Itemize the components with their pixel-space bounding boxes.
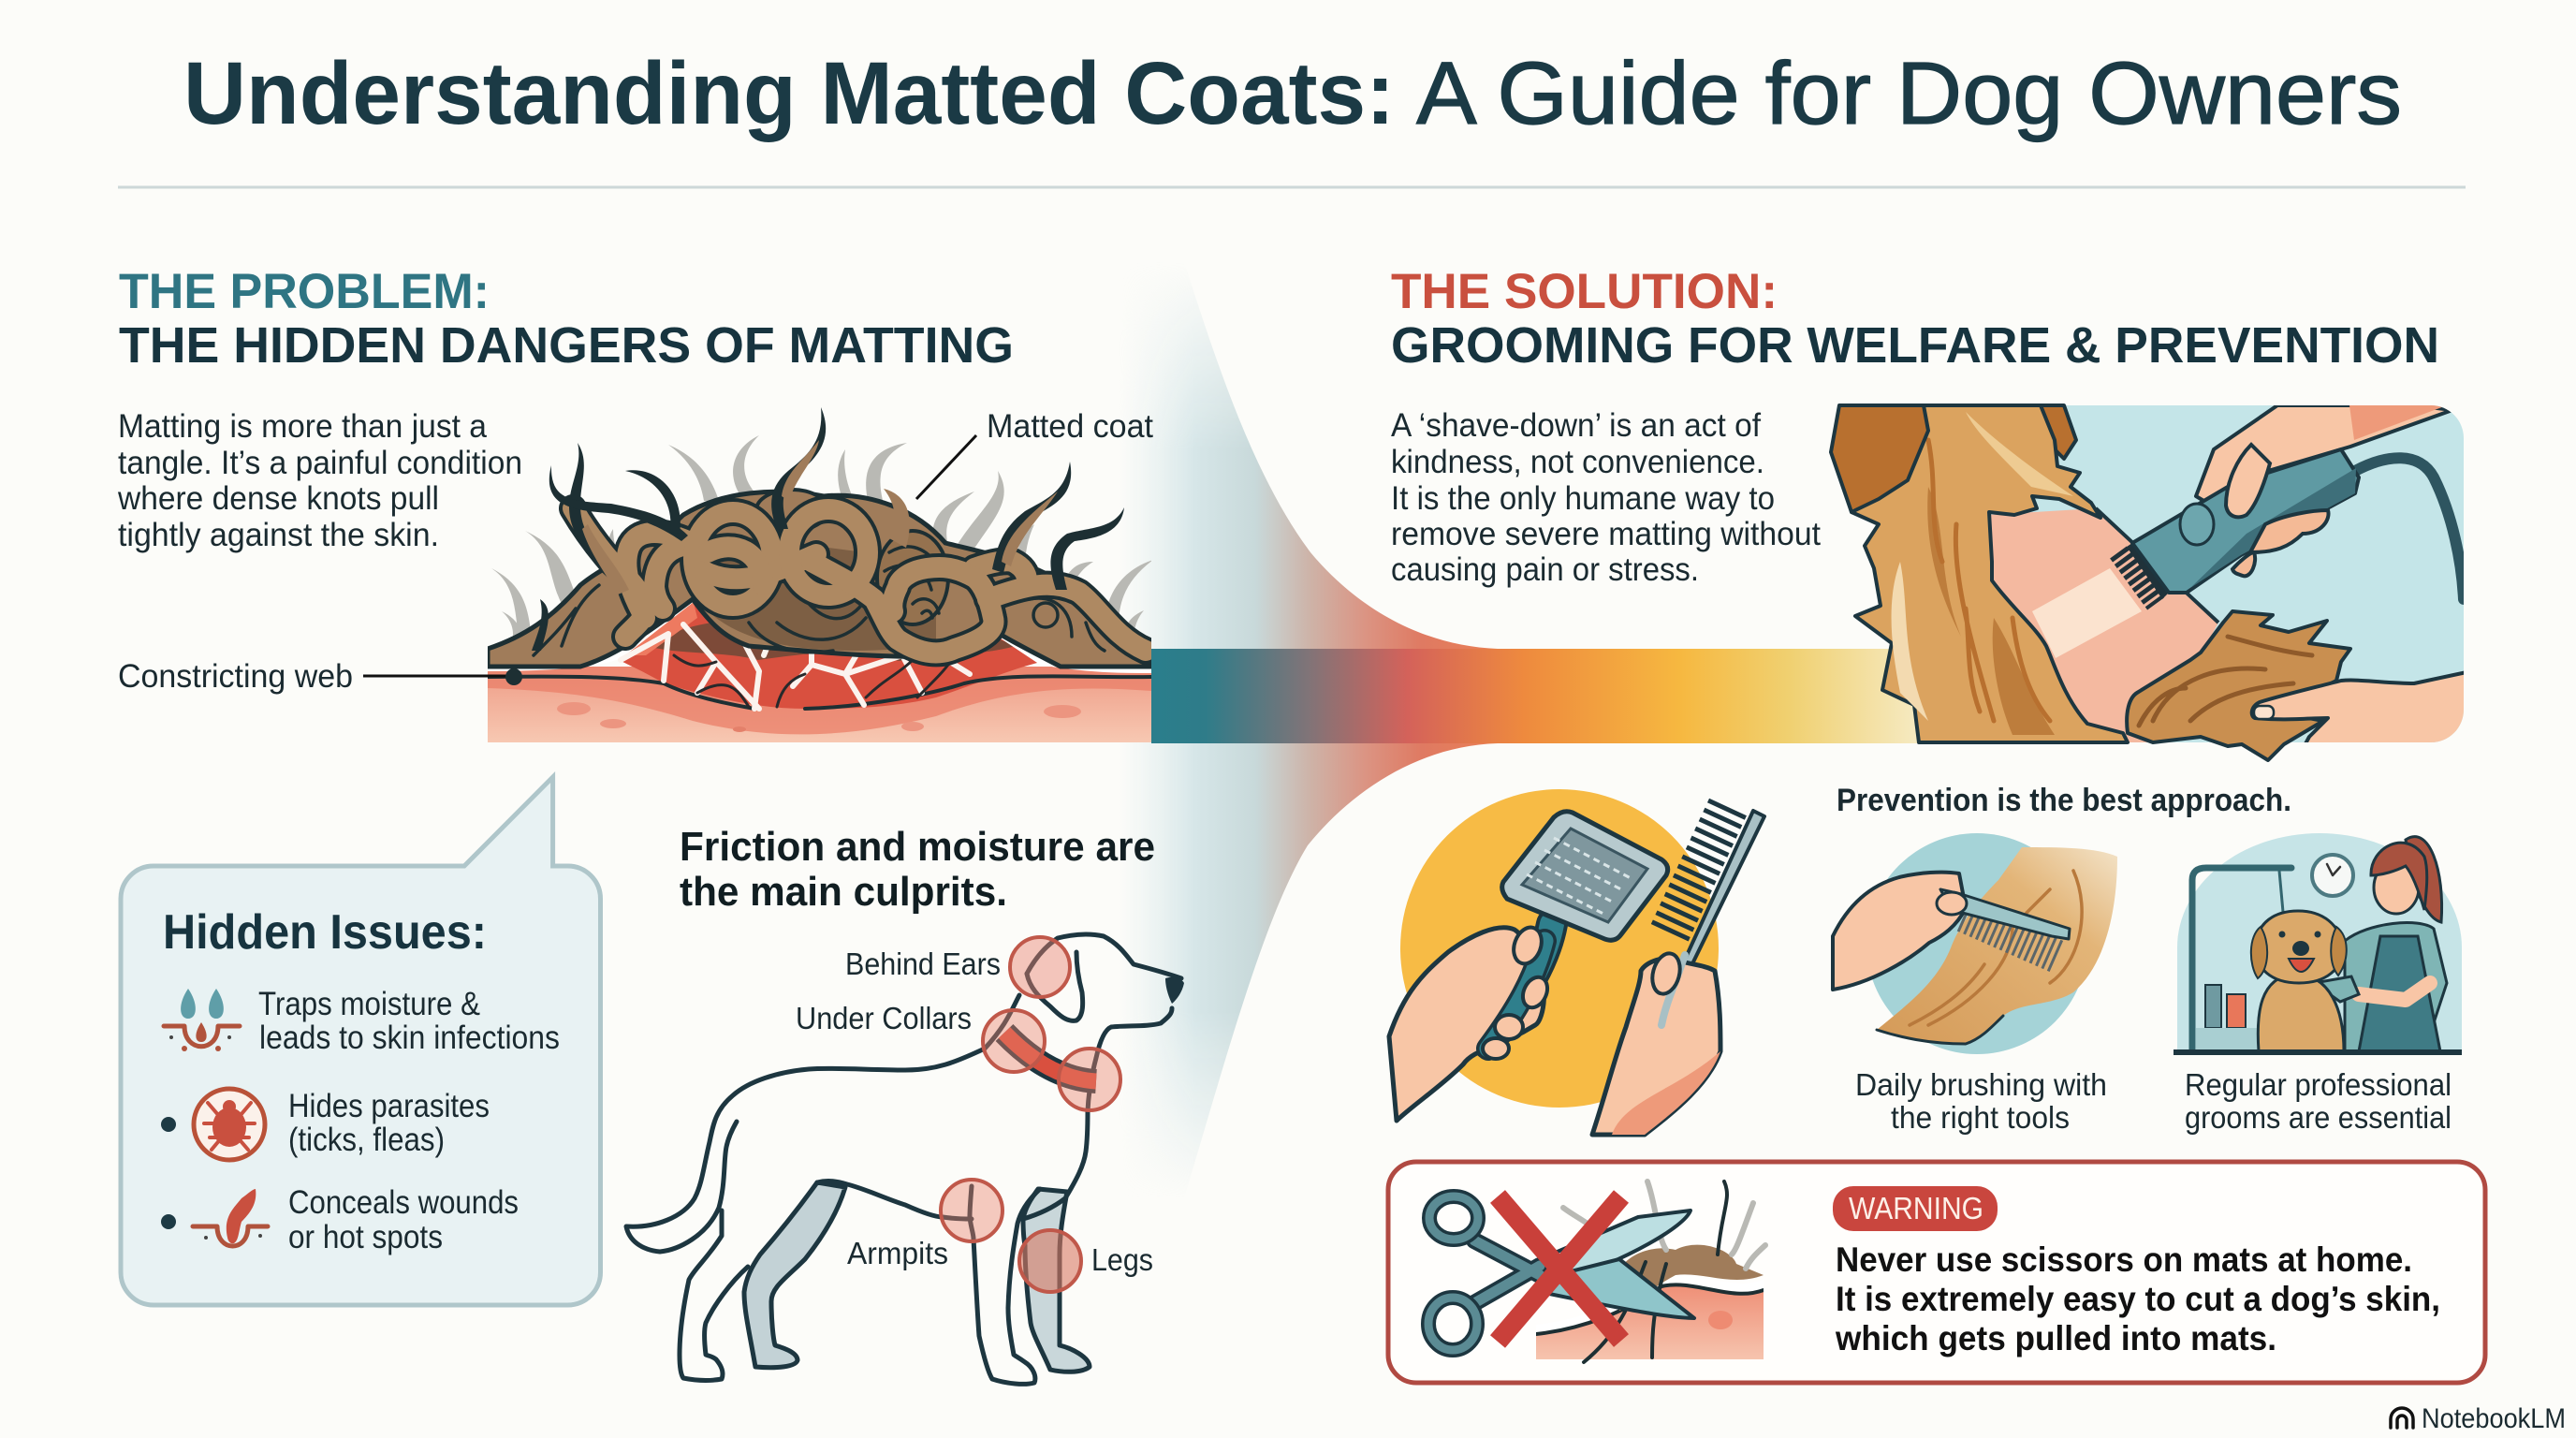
solution body text bbox=[1391, 407, 1821, 588]
heading: the problem: THE PROBLEM: bbox=[119, 264, 490, 319]
golden hair bbox=[1877, 847, 2117, 1044]
text: traps moisture bbox=[258, 986, 560, 1056]
problem body text: Matting is more than just a bbox=[118, 408, 488, 445]
tangled hair ropes bbox=[573, 508, 1146, 653]
label: matted coat: Matted coat bbox=[987, 408, 1153, 445]
skin swatch with fur bbox=[1536, 1245, 1764, 1359]
coat mass bbox=[488, 492, 1151, 667]
teal circle bbox=[1866, 833, 2087, 1054]
label: behind ears: Behind Ears bbox=[845, 946, 1001, 981]
label: matted coat bbox=[916, 408, 1153, 499]
label: constricting web: Constricting web bbox=[118, 658, 353, 695]
title: Understanding Matted Coats: bbox=[183, 44, 1395, 143]
clipper blade bbox=[2118, 543, 2169, 604]
warning text bbox=[1835, 1240, 2440, 1357]
solution body text: kindness, not convenience. bbox=[1391, 444, 1764, 480]
illustration: daily brushing bbox=[1833, 833, 2117, 1054]
heading: friction and moisture bbox=[680, 824, 1155, 915]
far ear bbox=[2032, 405, 2076, 459]
problem body text: tightly against the skin. bbox=[118, 517, 439, 553]
floor line bbox=[2174, 1049, 2462, 1055]
warning text: Never use scissors on mats at home. bbox=[1836, 1240, 2412, 1279]
golden dog bbox=[2251, 911, 2347, 1051]
far front leg bbox=[1023, 1189, 1090, 1372]
swirls on ropes bbox=[913, 598, 1105, 651]
solution body text: remove severe matting without bbox=[1391, 516, 1821, 552]
panel background bbox=[2012, 405, 2464, 742]
torso bbox=[2345, 923, 2447, 1051]
text: hides parasites: (ticks, fleas) bbox=[288, 1122, 445, 1158]
panel: warning bbox=[1388, 1162, 2485, 1383]
bullet bbox=[161, 1117, 176, 1132]
heading: friction and moisture: the main culprits. bbox=[680, 869, 1007, 915]
icon: moisture drops on skin bbox=[164, 989, 240, 1051]
bottles bbox=[2196, 985, 2258, 1051]
problem body text: where dense knots pull bbox=[117, 480, 439, 517]
far hind leg bbox=[744, 1182, 845, 1368]
red collar bbox=[1004, 1033, 1096, 1081]
caption: professional grooms: grooms are essential bbox=[2185, 1100, 2452, 1135]
problem body text bbox=[117, 408, 522, 553]
warning text: It is extremely easy to cut a dog’s skin, bbox=[1836, 1280, 2440, 1318]
warning text: which gets pulled into mats. bbox=[1835, 1319, 2276, 1357]
label: under collars: Under Collars bbox=[796, 1001, 972, 1035]
shaved skin bbox=[1989, 508, 2218, 742]
problem body text: tangle. It’s a painful condition bbox=[118, 445, 522, 481]
dog ear bbox=[1831, 405, 1928, 512]
illustration: clipper shaving dog bbox=[1831, 405, 2471, 760]
transition funnel: problem to solution bbox=[1076, 253, 1928, 1208]
badge: warning bbox=[1833, 1186, 1998, 1231]
wound with constricting web bbox=[488, 599, 1151, 709]
caption: daily brushing: the right tools bbox=[1891, 1100, 2070, 1135]
brush head bbox=[1502, 812, 1668, 940]
label: legs: Legs bbox=[1091, 1242, 1153, 1277]
brush bristles bbox=[1527, 838, 1631, 914]
dark knot shading bbox=[697, 534, 936, 651]
left hand gripping brush bbox=[1389, 928, 1544, 1121]
lower hand bbox=[2250, 670, 2464, 742]
grooming arm bbox=[2192, 868, 2291, 1050]
hotspot: under collar left bbox=[983, 1010, 1045, 1072]
caption: daily brushing: Daily brushing with bbox=[1855, 1067, 2107, 1102]
comb spine bbox=[1657, 811, 1764, 1025]
text: conceals wounds: Conceals wounds bbox=[288, 1184, 519, 1221]
solution body text: It is the only humane way to bbox=[1391, 480, 1775, 517]
caption: professional grooms: Regular professional bbox=[2185, 1067, 2452, 1102]
illustration: no scissors on mats bbox=[1428, 1181, 1765, 1362]
prevention heading: Prevention is the best approach. bbox=[1837, 783, 2291, 818]
dark hair strands bbox=[532, 407, 1124, 651]
caption: daily brushing bbox=[1855, 1067, 2107, 1135]
text: traps moisture: leads to skin infections bbox=[259, 1020, 560, 1056]
thumb on comb bbox=[1648, 950, 1684, 997]
text: conceals wounds bbox=[288, 1184, 519, 1255]
hotspot: behind ears bbox=[1010, 937, 1070, 997]
inner knot lines bbox=[534, 547, 941, 655]
heading: the solution bbox=[1391, 264, 2439, 374]
badge: warning: WARNING bbox=[1849, 1191, 1983, 1225]
face bbox=[2374, 861, 2419, 914]
groomer bbox=[2314, 837, 2447, 1051]
yellow circle bbox=[1400, 789, 1719, 1108]
hair cap bbox=[2371, 843, 2427, 910]
dog diagram with hotspots bbox=[626, 934, 1184, 1384]
red x bbox=[1498, 1196, 1621, 1342]
illustration: brush and comb bbox=[1389, 789, 1764, 1135]
illustration: professional groomer bbox=[2172, 824, 2471, 1058]
lighter shaved stripe bbox=[2032, 568, 2142, 658]
icon: wound under fur bbox=[193, 1189, 268, 1246]
arm and glove bbox=[2359, 983, 2430, 1000]
brown hair strands bbox=[582, 440, 1058, 594]
pale circle bbox=[2177, 833, 2462, 1049]
right hand holding comb bbox=[1592, 958, 1720, 1135]
upper hand and arm bbox=[2194, 405, 2452, 501]
fur highlights bbox=[1892, 412, 2073, 735]
heading: the problem: THE HIDDEN DANGERS OF MATTING bbox=[119, 317, 1014, 374]
text: conceals wounds: or hot spots bbox=[288, 1219, 443, 1255]
hand bbox=[1833, 873, 1966, 990]
thumb nail bbox=[2254, 706, 2274, 719]
panel: hidden issues callout bbox=[121, 777, 601, 1305]
comb teeth bbox=[1668, 807, 1728, 936]
heading: friction and moisture: Friction and moisture are bbox=[680, 824, 1155, 870]
icon: parasite in no-sign bbox=[194, 1089, 265, 1160]
caption: professional grooms bbox=[2185, 1067, 2452, 1135]
heading: the solution: GROOMING FOR WELFARE & PREVENTION bbox=[1391, 317, 2439, 374]
scissors handles bbox=[1428, 1196, 1540, 1350]
dog fur body bbox=[1842, 405, 2128, 742]
title bbox=[183, 44, 2402, 143]
ponytail bbox=[2406, 837, 2442, 922]
text: traps moisture: Traps moisture & bbox=[258, 986, 480, 1022]
scissors blades bbox=[1540, 1211, 1690, 1283]
heading: the problem bbox=[119, 264, 1014, 374]
text: hides parasites bbox=[288, 1088, 490, 1158]
solution body text: A ‘shave-down’ is an act of bbox=[1391, 407, 1761, 444]
skin layer bbox=[488, 667, 1151, 742]
apron bbox=[2359, 936, 2440, 1051]
comb bbox=[1940, 889, 2070, 957]
fingers over clipper bbox=[2232, 510, 2329, 576]
hotspot: legs bbox=[1019, 1230, 1081, 1292]
heading: hidden issues: Hidden Issues: bbox=[163, 905, 487, 960]
grey wispy hairs bbox=[491, 435, 1153, 648]
heading: the solution: THE SOLUTION: bbox=[1391, 264, 1778, 319]
label: constricting web bbox=[118, 658, 522, 695]
hotspot: under collar right bbox=[1059, 1049, 1120, 1110]
dog paw fur bbox=[2127, 611, 2350, 760]
hotspot: armpits bbox=[941, 1180, 1003, 1241]
thumb on comb bbox=[1937, 892, 1967, 915]
solution body text: causing pain or stress. bbox=[1391, 551, 1699, 588]
dog nose bbox=[1165, 977, 1184, 1004]
clock bbox=[2312, 855, 2353, 896]
bullet bbox=[161, 1214, 176, 1229]
brush handle bbox=[1488, 924, 1552, 1044]
clipper body bbox=[2132, 449, 2359, 593]
text: hides parasites: Hides parasites bbox=[288, 1088, 490, 1124]
dog outline bbox=[626, 934, 1181, 1384]
illustration: matted coat over skin bbox=[488, 407, 1153, 742]
clipper cord bbox=[2355, 458, 2464, 599]
fingers on brush handle bbox=[1483, 923, 1552, 1059]
label: armpits: Armpits bbox=[847, 1236, 948, 1270]
title: A Guide for Dog Owners bbox=[1416, 44, 2402, 143]
